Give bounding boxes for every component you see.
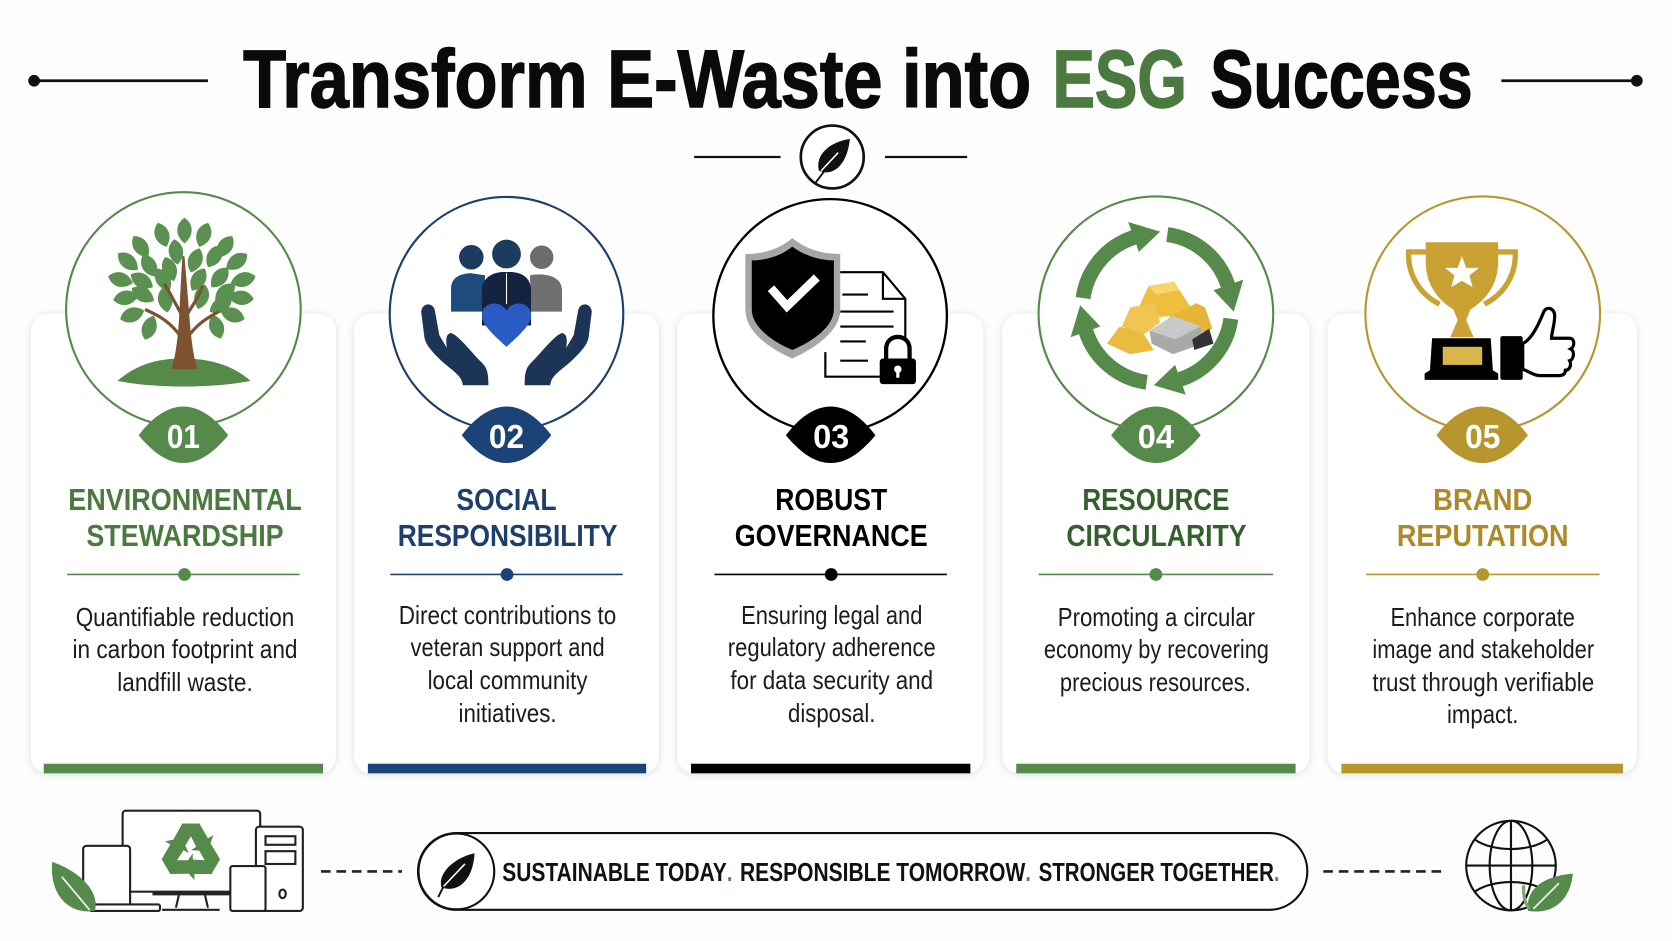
accent bar 5 xyxy=(1341,764,1623,773)
badge 02 xyxy=(462,407,551,463)
dashed connector left xyxy=(321,870,402,873)
icon: header leaf emblem xyxy=(694,126,967,188)
title: Success xyxy=(1210,34,1473,125)
panel: card 2 xyxy=(354,314,659,773)
text: card 3 body: regulatory adherence xyxy=(728,632,936,662)
text: card 2 body xyxy=(399,600,616,728)
panel: card 4 xyxy=(1002,314,1309,773)
heading: resource circularity xyxy=(1066,482,1247,553)
icon: shield and document xyxy=(745,238,916,384)
text: card 5 body: Enhance corporate xyxy=(1390,602,1575,632)
badge 05: 05 xyxy=(1465,419,1500,456)
text: card 4 body xyxy=(1044,602,1269,697)
heading: environmental stewardship: STEWARDSHIP xyxy=(86,518,284,553)
divider 5 xyxy=(1366,568,1599,581)
badge 03: 03 xyxy=(813,419,849,456)
text: card 5 body: impact. xyxy=(1447,699,1518,729)
slogan text xyxy=(502,857,1280,887)
slogan text: SUSTAINABLE TODAY. xyxy=(502,857,733,887)
icon: circular arrows and metals xyxy=(1071,222,1243,395)
heading: environmental stewardship: ENVIRONMENTAL xyxy=(68,482,302,517)
panel: card 5 xyxy=(1328,314,1637,773)
divider 2 xyxy=(390,568,623,581)
slogan pill xyxy=(418,833,1307,910)
text: card 1 body: Quantifiable reduction xyxy=(76,602,294,632)
badge 05 xyxy=(1436,407,1528,463)
dashed connector right xyxy=(1323,870,1446,873)
badge 03 xyxy=(786,407,875,463)
heading: social responsibility: SOCIAL xyxy=(456,482,557,517)
icon: globe and leaf xyxy=(1466,821,1573,912)
badge 04 xyxy=(1111,407,1201,463)
title rule left xyxy=(28,75,208,87)
slogan text: STRONGER TOGETHER. xyxy=(1039,857,1280,887)
panel: card 3 xyxy=(677,314,983,773)
text: card 3 body: Ensuring legal and xyxy=(741,600,922,630)
badge 04: 04 xyxy=(1138,419,1175,456)
text: card 3 body: disposal. xyxy=(788,698,875,728)
icon: recycled devices xyxy=(52,811,303,911)
badge 01 xyxy=(139,407,228,463)
text: card 1 body xyxy=(73,602,298,697)
text: card 2 body: Direct contributions to xyxy=(399,600,616,630)
circle: governance xyxy=(713,199,947,433)
accent bar 2 xyxy=(368,764,646,773)
accent bar 3 xyxy=(691,764,970,773)
slogan text: RESPONSIBLE TOMORROW. xyxy=(740,857,1031,887)
icon: pill leaf xyxy=(438,853,475,897)
heading: social responsibility xyxy=(398,482,618,553)
heading: brand reputation: BRAND xyxy=(1433,482,1532,517)
circle: reputation xyxy=(1365,196,1600,431)
text: card 5 body: trust through verifiable xyxy=(1372,667,1594,697)
text: card 2 body: local community xyxy=(428,665,588,695)
circle: circularity xyxy=(1039,196,1273,431)
icon: trophy and thumbs up xyxy=(1409,242,1574,380)
accent bar 4 xyxy=(1016,764,1296,773)
heading: resource circularity: CIRCULARITY xyxy=(1066,518,1247,553)
circle: social xyxy=(390,197,623,431)
text: card 3 body: for data security and xyxy=(730,665,933,695)
text: card 5 body: image and stakeholder xyxy=(1372,634,1594,664)
title rule right xyxy=(1501,75,1643,87)
text: card 3 body xyxy=(728,600,936,728)
text: card 4 body: precious resources. xyxy=(1060,667,1251,697)
heading: robust governance: ROBUST xyxy=(775,482,887,517)
badge 02: 02 xyxy=(489,419,524,456)
heading: resource circularity: RESOURCE xyxy=(1082,482,1229,517)
text: card 2 body: veteran support and xyxy=(411,632,605,662)
icon: tree xyxy=(106,218,257,387)
text: card 1 body: in carbon footprint and xyxy=(73,634,298,664)
icon: people and hands xyxy=(421,240,592,385)
badge 01: 01 xyxy=(167,419,200,456)
divider 3 xyxy=(714,568,947,581)
divider 4 xyxy=(1039,568,1273,581)
circle: environmental xyxy=(66,192,301,427)
panel: card 1 xyxy=(31,314,336,773)
heading: brand reputation: REPUTATION xyxy=(1397,518,1569,553)
accent bar 1 xyxy=(44,764,323,773)
heading: robust governance: GOVERNANCE xyxy=(735,518,928,553)
heading: brand reputation xyxy=(1397,482,1569,553)
title: ESG xyxy=(1052,34,1187,125)
divider 1 xyxy=(67,568,300,581)
heading: robust governance xyxy=(735,482,928,553)
text: card 1 body: landfill waste. xyxy=(117,667,253,697)
text: card 2 body: initiatives. xyxy=(459,698,557,728)
title: Transform E-Waste into xyxy=(243,34,1031,125)
heading: environmental stewardship xyxy=(68,482,302,553)
text: card 4 body: economy by recovering xyxy=(1044,634,1269,664)
text: card 5 body xyxy=(1372,602,1594,729)
heading: social responsibility: RESPONSIBILITY xyxy=(398,518,618,553)
text: card 4 body: Promoting a circular xyxy=(1058,602,1255,632)
